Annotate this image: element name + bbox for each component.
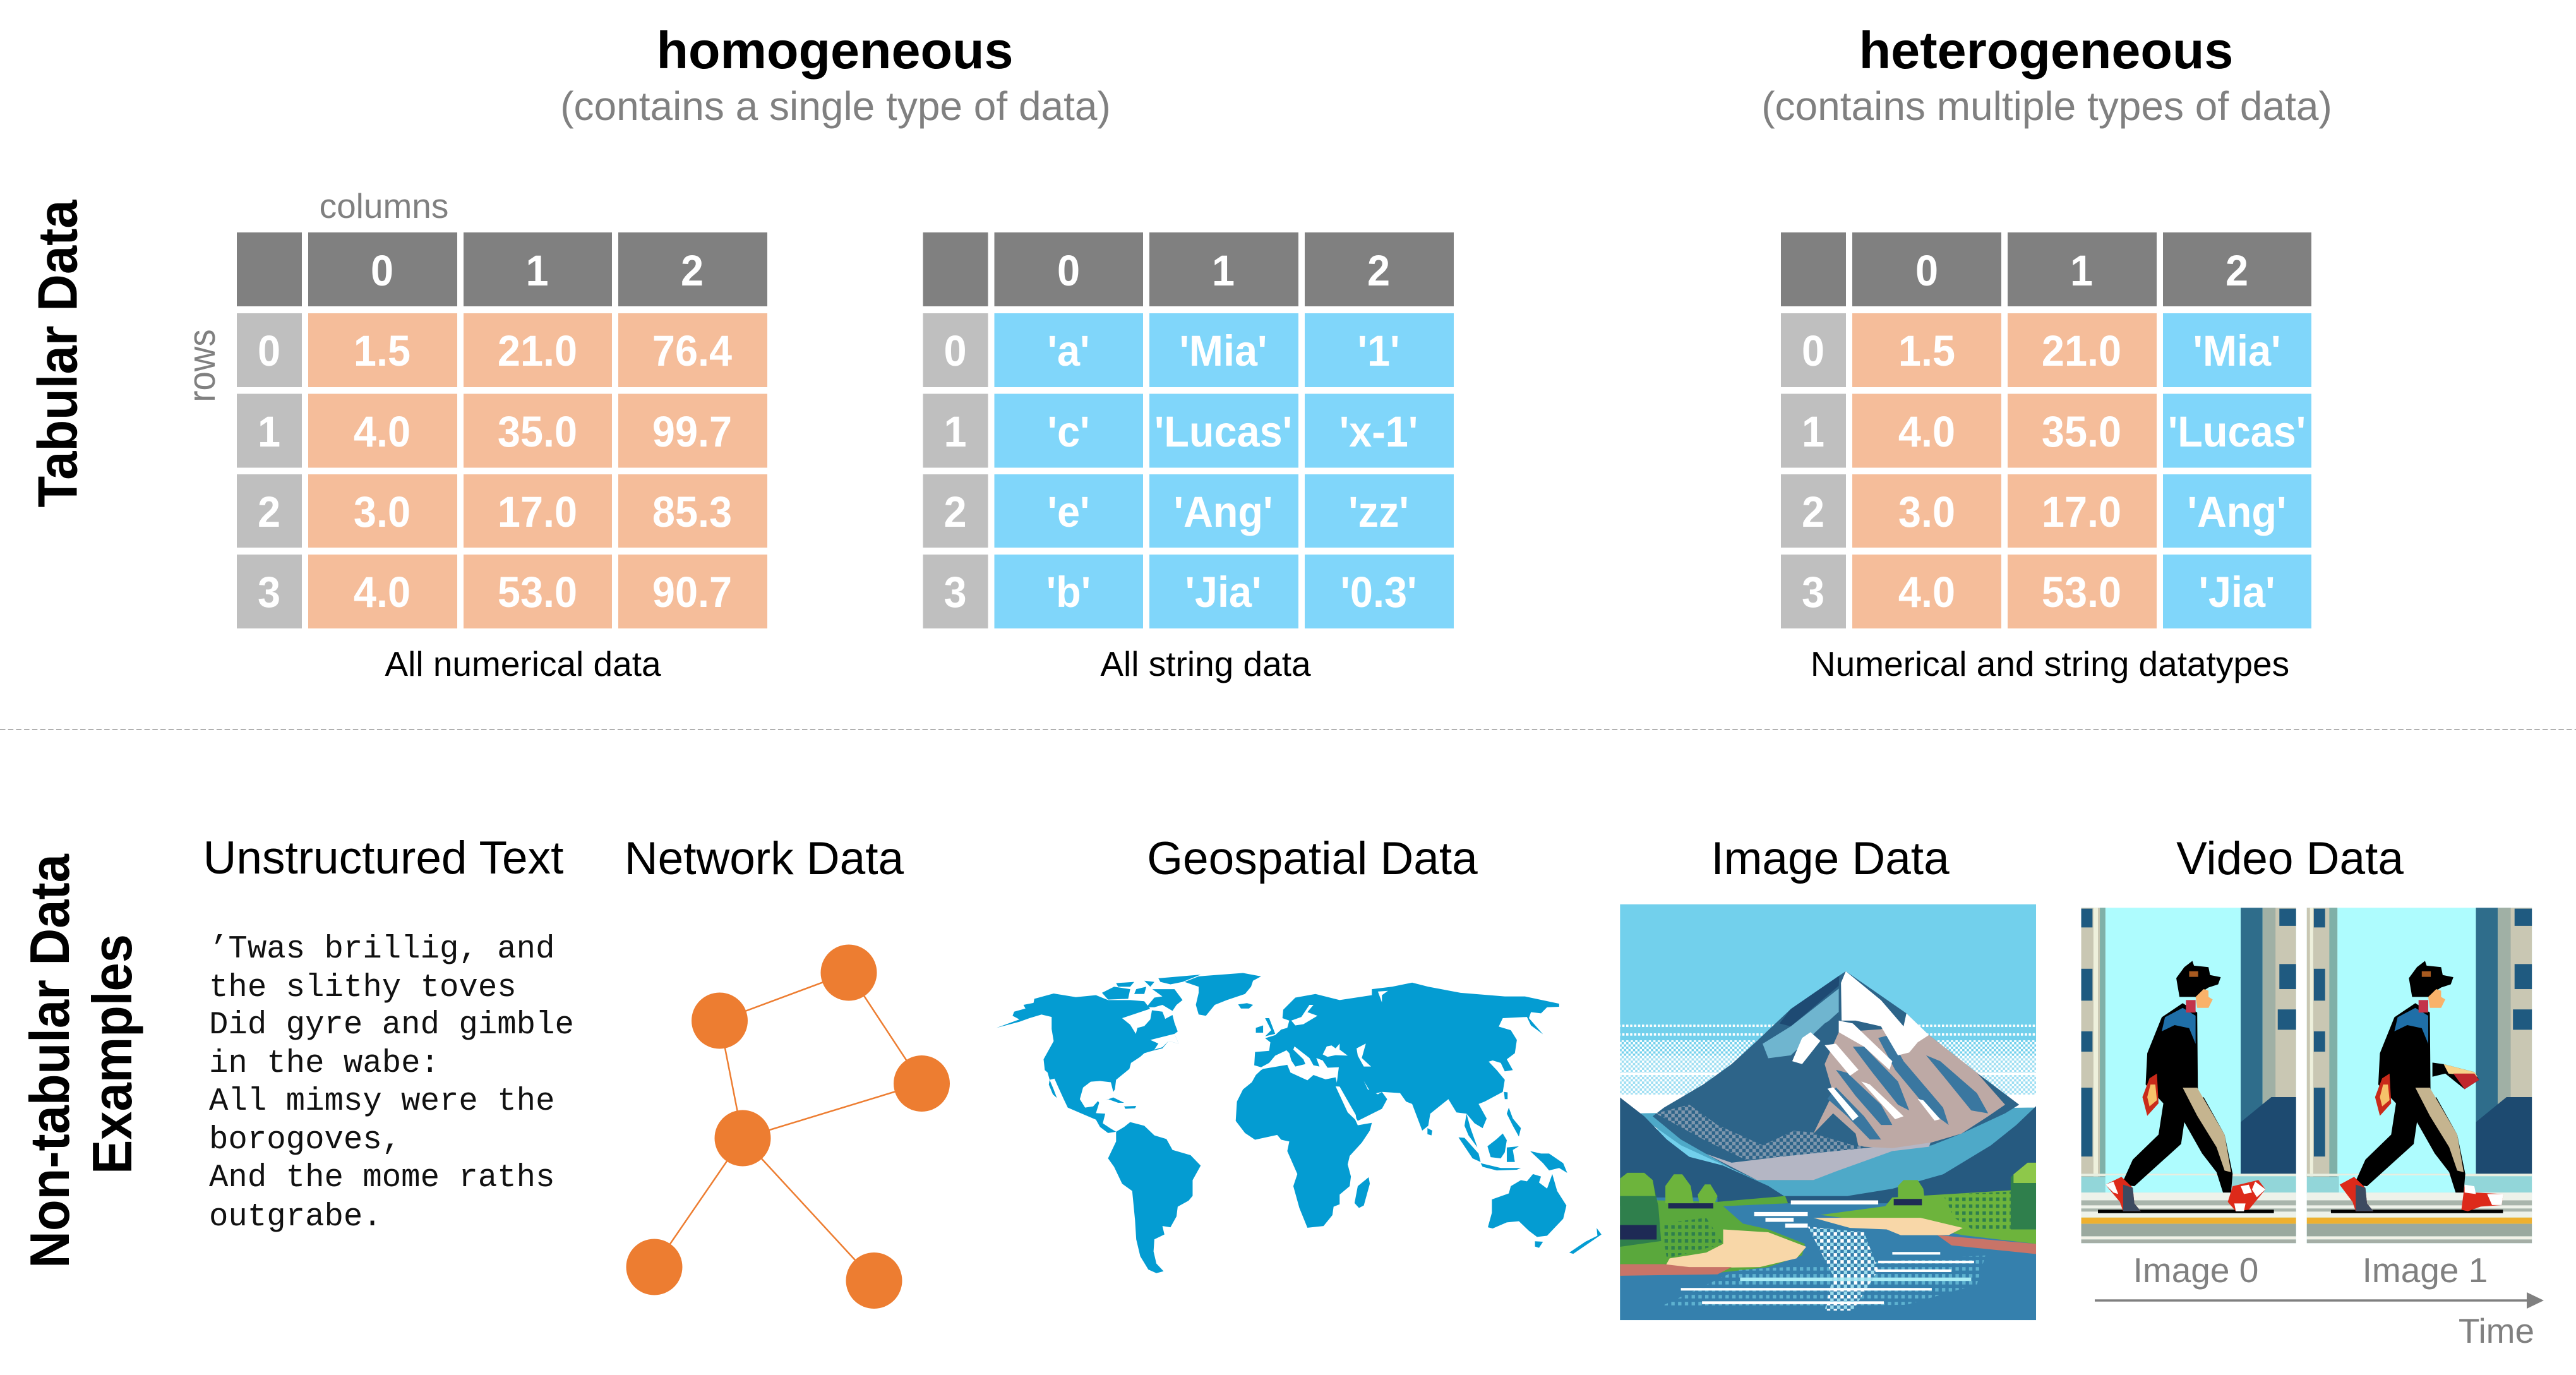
heading: homogeneous: (contains a single type of data): [560, 83, 1111, 129]
table: mixed datatypes: 'Jia': [2198, 568, 2275, 616]
table: all string data: 0: [944, 327, 967, 375]
heading: homogeneous: [560, 21, 1111, 129]
table: all string data: 'a': [1048, 327, 1089, 375]
text block: poem: in the wabe:: [209, 1046, 440, 1082]
image: pixel-art mountain: [1620, 904, 2036, 1320]
world map: [997, 973, 1602, 1273]
table: all numerical data: 35.0: [498, 407, 577, 456]
heading: Network Data: Network Data: [625, 833, 904, 884]
text block: poem: the slithy toves: [209, 970, 517, 1006]
section label: Non-tabular Data Examples: [18, 853, 143, 1268]
label: Image 0: Image 0: [2133, 1251, 2258, 1290]
heading: heterogeneous: heterogeneous: [1859, 21, 2233, 80]
table: mixed datatypes: 1.5: [1898, 327, 1955, 375]
table: all numerical data: 4.0: [354, 568, 410, 616]
arrow: time axis: [2095, 1292, 2544, 1309]
table: all string data: 1: [944, 407, 967, 456]
table: all string data: 'Jia': [1185, 568, 1262, 616]
table: all numerical data: 1: [258, 407, 280, 456]
table: all numerical data: 0: [371, 246, 393, 295]
table: all numerical data: 99.7: [652, 407, 732, 456]
table: mixed datatypes: 3: [1802, 568, 1824, 616]
caption: all string data: All string data: [1100, 644, 1311, 683]
table: all numerical data: 3.0: [354, 488, 410, 536]
table: all string data: [923, 232, 1454, 628]
table: mixed datatypes: 17.0: [2042, 488, 2121, 536]
text block: poem: All mimsy were the: [209, 1084, 555, 1120]
table: mixed datatypes: 0: [1802, 327, 1824, 375]
text block: poem: [209, 932, 574, 1235]
table: all string data: 'zz': [1348, 488, 1409, 536]
table: all string data: 'c': [1048, 407, 1089, 456]
table: all string data: 2: [944, 488, 967, 536]
table: all numerical data: 53.0: [498, 568, 577, 616]
table: all string data: 1: [1212, 246, 1235, 295]
table: all numerical data: [237, 232, 767, 628]
text block: poem: borogoves,: [209, 1122, 401, 1158]
network graph: [626, 945, 950, 1309]
table: all numerical data: 2: [258, 488, 280, 536]
image frame 0: walking person: [2082, 908, 2296, 1243]
table: mixed datatypes: 2: [2226, 246, 2248, 295]
heading: Video Data: Video Data: [2176, 833, 2404, 884]
label: Time: Time: [2459, 1311, 2534, 1350]
heading: Geospatial Data: Geospatial Data: [1147, 833, 1478, 884]
axis label: columns: columns: [320, 186, 448, 225]
table: all numerical data: 1.5: [354, 327, 410, 375]
text block: poem: outgrabe.: [209, 1199, 382, 1235]
table: all string data: 'Lucas': [1154, 407, 1292, 456]
table: mixed datatypes: 'Lucas': [2168, 407, 2306, 456]
table: mixed datatypes: 2: [1802, 488, 1824, 536]
label: Image 1: Image 1: [2363, 1251, 2488, 1290]
table: mixed datatypes: 'Ang': [2188, 488, 2286, 536]
table: all numerical data: 2: [681, 246, 704, 295]
table: all numerical data: 21.0: [498, 327, 577, 375]
text block: poem: And the mome raths: [209, 1160, 555, 1196]
table: all string data: 0: [1057, 246, 1080, 295]
heading: Image Data: Image Data: [1711, 833, 1950, 884]
table: all numerical data: 0: [258, 327, 280, 375]
table: mixed datatypes: 1: [2070, 246, 2093, 295]
table: mixed datatypes: 4.0: [1898, 407, 1955, 456]
table: mixed datatypes: 0: [1915, 246, 1938, 295]
text block: poem: Did gyre and gimble: [209, 1007, 574, 1043]
table: mixed datatypes: 35.0: [2042, 407, 2121, 456]
table: all numerical data: 4.0: [354, 407, 410, 456]
table: all string data: '1': [1358, 327, 1399, 375]
table: all string data: 'Mia': [1180, 327, 1267, 375]
section label: Non-tabular Data Examples: Non-tabular Data: [18, 853, 81, 1268]
table: all string data: 'Ang': [1174, 488, 1273, 536]
heading: Unstructured Text: Unstructured Text: [203, 832, 563, 884]
section label: Non-tabular Data Examples: Examples: [81, 934, 143, 1174]
heading: heterogeneous: [1761, 21, 2332, 129]
table: mixed datatypes: 'Mia': [2193, 327, 2280, 375]
caption: numerical and string datatypes: Numerical and string datatypes: [1811, 644, 2289, 683]
table: all numerical data: 17.0: [498, 488, 577, 536]
section label: Tabular Data: Tabular Data: [27, 200, 88, 507]
table: mixed datatypes: 4.0: [1898, 568, 1955, 616]
table: all numerical data: 85.3: [652, 488, 732, 536]
table: all string data: '0.3': [1340, 568, 1417, 616]
image frame 1: walking person with arm forward: [2307, 908, 2532, 1243]
table: all string data: 'x-1': [1339, 407, 1418, 456]
table: all numerical data: 76.4: [652, 327, 732, 375]
table: all numerical data: 90.7: [652, 568, 732, 616]
heading: homogeneous: homogeneous: [656, 21, 1014, 80]
table: all string data: 3: [944, 568, 967, 616]
caption: all numerical data: All numerical data: [385, 644, 661, 683]
axis label: rows: rows: [181, 329, 224, 402]
text block: poem: ’Twas brillig, and: [209, 932, 555, 968]
table: all string data: 'e': [1048, 488, 1089, 536]
table: mixed datatypes: 21.0: [2042, 327, 2121, 375]
table: all numerical data: 1: [525, 246, 549, 295]
heading: heterogeneous: (contains multiple types of data): [1761, 83, 2332, 129]
table: mixed datatypes: [1781, 232, 2311, 628]
table: all string data: 'b': [1046, 568, 1091, 616]
table: all numerical data: 3: [258, 568, 280, 616]
table: mixed datatypes: 1: [1802, 407, 1824, 456]
table: mixed datatypes: 53.0: [2042, 568, 2121, 616]
table: all string data: 2: [1367, 246, 1390, 295]
table: mixed datatypes: 3.0: [1898, 488, 1955, 536]
